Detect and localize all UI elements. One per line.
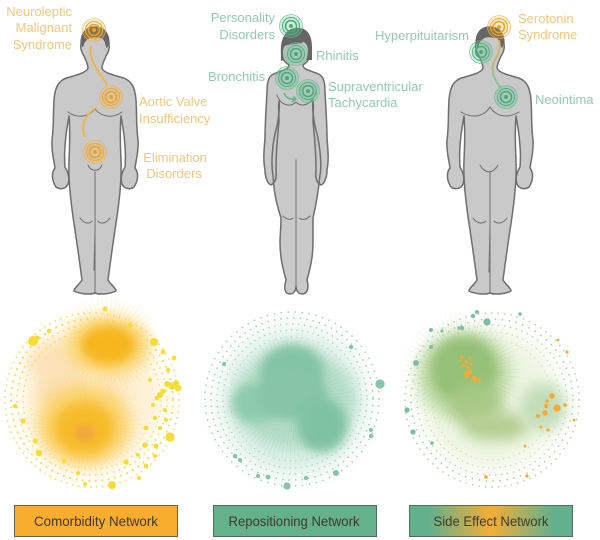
teal nodes [404, 310, 522, 445]
anatomy lines [461, 107, 519, 293]
target: hyperpituitarism [470, 40, 492, 64]
label: serotonin syndrome: Serotonin [518, 11, 574, 26]
label: neointima: Neointima [535, 92, 594, 107]
arrow: chest [284, 93, 296, 102]
hair [81, 27, 109, 48]
target: chest [100, 86, 122, 108]
label: elimination disorders: Elimination [143, 150, 207, 165]
dotted rings [405, 313, 579, 487]
radial spokes [255, 363, 329, 437]
haze [420, 330, 560, 470]
halos around hubs [66, 315, 150, 375]
large nodes [13, 307, 181, 489]
body outline [447, 27, 533, 294]
dotted rings [5, 313, 179, 487]
label: supraventricular tachycardia: Tachycardia [328, 95, 398, 110]
anatomy lines [277, 92, 316, 286]
orange haze upper left [28, 340, 88, 384]
label: serotonin syndrome: Syndrome [518, 27, 577, 42]
halo around core [235, 352, 355, 448]
orange nodes [459, 339, 575, 479]
target: serotonin syndrome [488, 16, 510, 38]
network: repositioning [205, 312, 385, 490]
button: comorbidity network [14, 506, 178, 536]
radial spokes [81, 318, 135, 372]
label: personality disorders: Disorders [219, 27, 275, 42]
arrow: head to chest [493, 40, 501, 88]
button: repositioning network: Repositioning Network [228, 513, 360, 529]
cluster: right hub [520, 383, 566, 431]
figure: male body with comorbidity targets [52, 18, 138, 294]
label: neuroleptic malignant syndrome: Syndrome [13, 37, 72, 52]
haze [221, 330, 365, 474]
button: comorbidity network: Comorbidity Network [34, 513, 159, 529]
haze [22, 328, 162, 468]
labels: side effect conditions [375, 11, 594, 107]
network: side effect [404, 310, 579, 487]
anatomy lines [68, 109, 122, 293]
label: neuroleptic malignant syndrome: Malignant [16, 20, 72, 35]
hair [281, 28, 312, 61]
arrow: from chest to head [90, 46, 107, 85]
label: rhinitis: Rhinitis [316, 48, 359, 63]
button: side effect network [410, 506, 572, 536]
labels: comorbidity conditions [6, 4, 211, 181]
figure: female body with repositioning targets [264, 14, 328, 294]
halo around hub [418, 331, 510, 419]
radial spokes [432, 340, 496, 404]
button: repositioning network [214, 506, 376, 536]
target: head [82, 18, 106, 42]
label: personality disorders: Personality [211, 10, 275, 25]
labels: repositioning conditions [208, 10, 423, 110]
target: personality disorders [280, 14, 302, 38]
target: abdomen [84, 140, 106, 164]
label: aortic valve insufficiency: Aortic Valve [139, 94, 207, 109]
large nodes [222, 345, 385, 490]
hair [476, 27, 504, 48]
label: aortic valve insufficiency: Insufficiency [139, 111, 211, 126]
cluster: upper left hub [431, 337, 497, 403]
dotted rings [205, 312, 379, 486]
cluster: upper hub [81, 326, 135, 364]
label: neuroleptic malignant syndrome: Neuroleptic [6, 4, 72, 19]
label: elimination disorders: Disorders [146, 166, 202, 181]
target: bronchitis [276, 66, 298, 90]
label: hyperpituitarism: Hyperpituitarism [375, 28, 469, 43]
arrow: from abdomen to chest [83, 107, 97, 137]
target: rhinitis [284, 42, 308, 66]
target: supraventricular tachycardia [296, 80, 320, 102]
target: neointima [494, 86, 518, 108]
body outline [52, 27, 138, 294]
body outline [264, 38, 328, 294]
figure: male body with side effect targets [447, 16, 533, 294]
cluster: lower hub [461, 411, 529, 441]
button: side effect network: Side Effect Network [434, 513, 549, 529]
cluster: lower hub [54, 402, 114, 454]
network: comorbidity [5, 307, 181, 489]
cluster: network core [260, 344, 324, 400]
label: bronchitis: Bronchitis [208, 69, 266, 84]
label: supraventricular tachycardia: Supraventricular [328, 79, 423, 94]
